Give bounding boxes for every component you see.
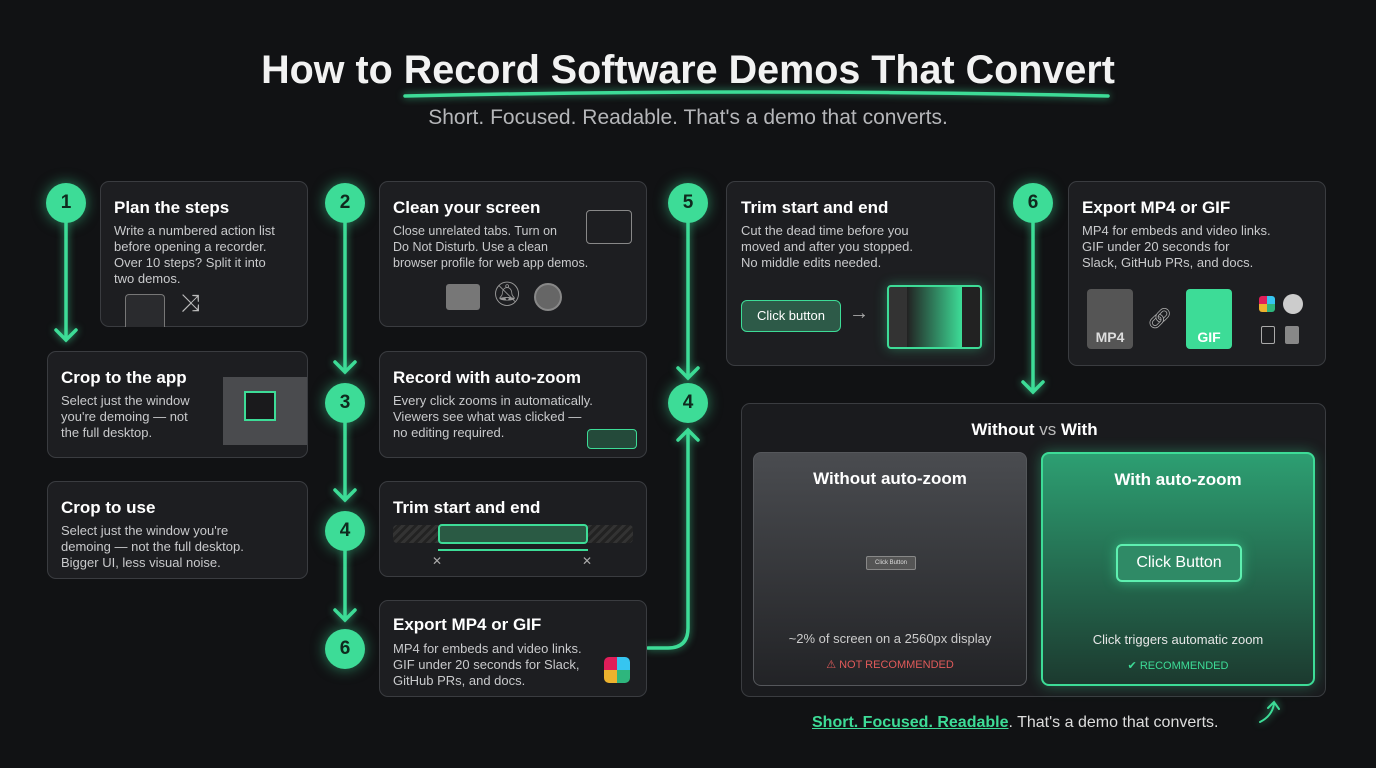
card: crop to use: Crop to use: [61, 498, 155, 517]
card: export mp4 or gif: [379, 600, 647, 697]
step 3: 3: [340, 392, 350, 413]
card: plan the steps: Over 10 steps? Split it into: [114, 255, 266, 270]
icon: browser: [586, 210, 632, 244]
with auto-zoom: [1041, 452, 1315, 686]
with auto-zoom: Click triggers automatic zoom: [1093, 632, 1263, 647]
icon: button: [587, 429, 637, 449]
card: trim start and end (right): →: [849, 302, 869, 324]
card: crop to the app: Crop to the app: [61, 368, 187, 387]
click button: [741, 300, 841, 332]
card: trim start and end (right): moved and after you stopped.: [741, 239, 913, 254]
step 4 right: [668, 383, 708, 423]
card: clean your screen: [379, 181, 647, 327]
title: How to Record Software Demos That Convert: [261, 48, 1115, 92]
card: plan the steps: [100, 181, 308, 327]
step 4 right: 4: [683, 392, 693, 413]
subtitle: Short. Focused. Readable. That's a demo that converts.: [428, 106, 948, 129]
trimmed clip: [887, 285, 982, 349]
without auto-zoom: Without auto-zoom: [813, 469, 967, 488]
card: crop to use: [47, 481, 308, 579]
card: export right: Slack, GitHub PRs, and docs.: [1082, 255, 1253, 270]
card: export right: MP4 for embeds and video links.: [1082, 223, 1271, 238]
icon: list: [125, 294, 165, 327]
with auto-zoom: With auto-zoom: [1114, 470, 1242, 489]
card: crop to use: Select just the window you're: [61, 523, 228, 538]
card: record with auto-zoom: Record with auto-zoom: [393, 368, 581, 387]
card: trim start and end: Trim start and end: [393, 498, 540, 517]
without auto-zoom: ⚠ NOT RECOMMENDED: [826, 659, 954, 671]
card: record with auto-zoom: Every click zooms in automatically.: [393, 393, 593, 408]
with auto-zoom: Click Button: [1136, 554, 1222, 571]
timeline: [393, 525, 633, 543]
card: crop to use: Bigger UI, less visual noise.: [61, 555, 221, 570]
card: export mp4 or gif: MP4 for embeds and video links.: [393, 641, 582, 656]
without auto-zoom: ~2% of screen on a 2560px display: [789, 631, 991, 646]
card: clean your screen: browser profile for web app demos.: [393, 256, 588, 270]
card: export mp4 or gif: Export MP4 or GIF: [393, 615, 541, 634]
card: export right: GIF under 20 seconds for: [1082, 239, 1229, 254]
step 5: [668, 183, 708, 223]
step 6: [325, 629, 365, 669]
card: record with auto-zoom: Viewers see what was clicked —: [393, 409, 581, 424]
step 2: 2: [340, 192, 350, 213]
card: trim start and end: ✕: [432, 554, 442, 568]
icon: mp4 file: MP4: [1096, 329, 1124, 345]
step 2: [325, 183, 365, 223]
icon: slack: [604, 657, 630, 683]
card: crop to the app: you're demoing — not: [61, 409, 188, 424]
card: plan the steps: before opening a recorder.: [114, 239, 266, 254]
card: clean your screen: Do Not Disturb. Use a clean: [393, 240, 548, 254]
card: crop to the app: Select just the window: [61, 393, 190, 408]
card: export right: [1068, 181, 1326, 366]
icons: tabs bell user: [446, 284, 480, 310]
without auto-zoom: Click Button: [875, 560, 907, 566]
card: clean your screen: Clean your screen: [393, 198, 540, 217]
card: record with auto-zoom: no editing required.: [393, 425, 504, 440]
card: plan the steps: Write a numbered action list: [114, 223, 275, 238]
card: export right: 🔗︎: [1147, 308, 1172, 330]
icon: mp4 file: [1087, 289, 1133, 349]
icon: monitor crop: [223, 377, 307, 445]
click button: Click button: [757, 308, 825, 323]
card: crop to use: demoing — not the full desktop.: [61, 539, 244, 554]
step 6: 6: [340, 638, 350, 659]
card: trim start and end (right): Cut the dead time before you: [741, 223, 909, 238]
step 6 right: 6: [1028, 192, 1038, 213]
icon: gif file: [1186, 289, 1232, 349]
card: trim start and end (right): [726, 181, 995, 366]
card: trim start and end (right): Trim start and end: [741, 198, 888, 217]
footer tagline: Short. Focused. Readable. That's a demo that converts.: [812, 714, 1218, 731]
panel: without vs with: [741, 403, 1326, 697]
step 1: [46, 183, 86, 223]
step 5: 5: [683, 192, 693, 213]
card: trim start and end (right): No middle edits needed.: [741, 255, 881, 270]
step 6 right: [1013, 183, 1053, 223]
step 1: 1: [61, 192, 71, 213]
card: export mp4 or gif: GIF under 20 seconds for Slack,: [393, 657, 579, 672]
without auto-zoom: [753, 452, 1027, 686]
card: clean your screen: Close unrelated tabs. Turn on: [393, 224, 557, 238]
card: export right: Export MP4 or GIF: [1082, 198, 1230, 217]
card: plan the steps: two demos.: [114, 271, 180, 286]
with auto-zoom: ✔ RECOMMENDED: [1128, 660, 1228, 672]
card: plan the steps: Plan the steps: [114, 198, 229, 217]
card: clean your screen: 🔕︎: [492, 281, 522, 308]
step 3: [325, 383, 365, 423]
step 4: [325, 511, 365, 551]
card: crop to the app: [47, 351, 308, 458]
panel: without vs with: Without vs With: [971, 420, 1098, 439]
card: record with auto-zoom: [379, 351, 647, 458]
card: trim start and end: [379, 481, 647, 577]
card: crop to the app: the full desktop.: [61, 425, 152, 440]
card: export mp4 or gif: GitHub PRs, and docs.: [393, 673, 525, 688]
step 4: 4: [340, 520, 350, 541]
card: trim start and end: ✕: [582, 554, 592, 568]
icon: shuffle: ⤨: [181, 290, 200, 317]
icon: gif file: GIF: [1197, 329, 1221, 345]
